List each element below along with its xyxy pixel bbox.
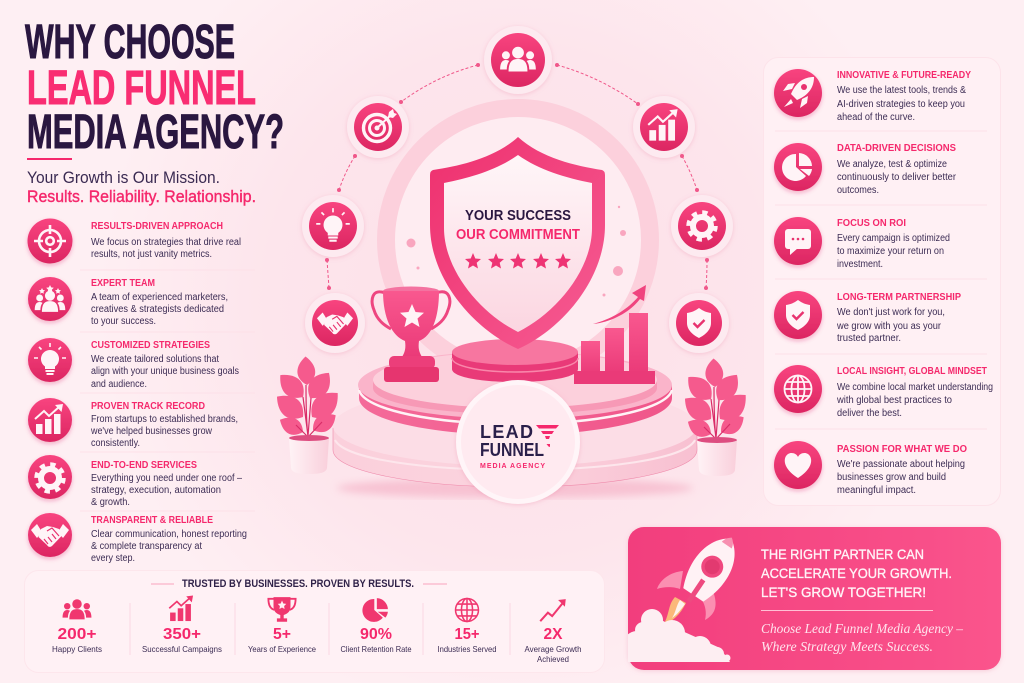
- item: proven track record: we've helped businesses grow: [90, 426, 213, 437]
- item: end-to-end services: & growth.: [91, 497, 130, 508]
- item: expert team: A team of experienced marketers,: [91, 292, 228, 303]
- cta headline: THE RIGHT PARTNER CAN: [761, 546, 924, 562]
- item: data-driven decisions: continuously to deliver better: [837, 172, 957, 183]
- orbit icon: light bulb: [302, 195, 364, 257]
- stat: successful campaigns: [142, 596, 222, 654]
- item: data-driven decisions: [774, 142, 957, 196]
- item: results-driven approach: results, not just vanity metrics.: [91, 249, 212, 260]
- stat: happy clients: [52, 599, 102, 654]
- dashed orbit connectors: [325, 63, 709, 290]
- item: innovative and future-ready: ahead of the curve.: [837, 112, 915, 123]
- item: end-to-end services: Everything you need under one roof –: [91, 473, 242, 484]
- orbit icon: target: [347, 96, 409, 158]
- trophy: [372, 286, 450, 382]
- item: local insight, global mindset: with global best practices to: [836, 395, 952, 406]
- cta tagline: Choose Lead Funnel Media Agency –: [761, 622, 964, 637]
- main title: LEAD FUNNEL: [27, 62, 256, 115]
- item: local insight, global mindset: We combine local market understanding: [837, 382, 993, 393]
- halo ring behind shield: [386, 108, 650, 372]
- item: results-driven approach: We focus on strategies that drive real: [91, 237, 241, 248]
- stat: average growth achieved: [524, 599, 582, 664]
- item: results-driven approach: RESULTS-DRIVEN APPROACH: [91, 220, 223, 232]
- stat: years of experience: [248, 597, 316, 654]
- main title: WHY CHOOSE: [25, 16, 235, 69]
- decorative spheres: [406, 206, 626, 296]
- item: expert team: [28, 277, 228, 327]
- stat: industries served: [438, 599, 497, 654]
- stat: client retention rate: [340, 598, 412, 654]
- item: long-term partnership: trusted partner.: [837, 333, 901, 344]
- item: local insight, global mindset: LOCAL INSIGHT, GLOBAL MINDSET: [837, 365, 987, 377]
- main title: [25, 16, 284, 159]
- logo funnel mark: [536, 425, 559, 447]
- item: proven track record: [28, 398, 238, 449]
- item: proven track record: From startups to established brands,: [91, 414, 238, 425]
- stat: years of experience: Years of Experience: [248, 644, 316, 654]
- item: passion for what we do: meaningful impact.: [837, 485, 916, 496]
- shield heading: [456, 208, 580, 243]
- item: passion for what we do: businesses grow and build: [837, 472, 946, 483]
- item: transparent and reliable: & complete transparency at: [91, 541, 202, 552]
- shield badge: [430, 137, 605, 349]
- shield heading: YOUR SUCCESS: [465, 208, 571, 224]
- item: data-driven decisions: We analyze, test & optimize: [837, 159, 947, 170]
- item: proven track record: consistently.: [91, 438, 140, 449]
- cta headline: LET'S GROW TOGETHER!: [761, 584, 926, 600]
- item: passion for what we do: PASSION FOR WHAT WE DO: [837, 443, 967, 455]
- cta headline: ACCELERATE YOUR GROWTH.: [761, 565, 952, 581]
- subtitle with accent rule: Your Growth is Our Mission.: [27, 168, 220, 187]
- item: innovative and future-ready: We use the latest tools, trends &: [837, 85, 966, 96]
- panel: trust stats: [24, 570, 604, 672]
- item: end-to-end services: END-TO-END SERVICES: [91, 459, 197, 471]
- central illustration: [271, 26, 753, 504]
- orbit icon: gear: [671, 195, 733, 257]
- cta tagline: Where Strategy Meets Success.: [761, 640, 933, 655]
- item: end-to-end services: strategy, execution, automation: [91, 485, 221, 496]
- five stars: [465, 253, 571, 268]
- stats heading: TRUSTED BY BUSINESSES. PROVEN BY RESULTS.: [182, 578, 414, 590]
- stat: average growth achieved: 2X: [544, 626, 563, 643]
- item: end-to-end services: [28, 455, 242, 508]
- stat: successful campaigns: 350+: [163, 626, 201, 643]
- item: transparent and reliable: [28, 513, 247, 564]
- item: transparent and reliable: every step.: [91, 553, 135, 564]
- item: long-term partnership: [774, 291, 961, 344]
- orbit icon: shield: [669, 293, 729, 353]
- item: focus on roi: [774, 217, 950, 270]
- stat: industries served: 15+: [454, 626, 480, 643]
- stat: happy clients: Happy Clients: [52, 644, 102, 654]
- item: expert team: to your success.: [91, 316, 156, 327]
- logo disc: MEDIA AGENCY: [480, 463, 545, 470]
- logo disc: FUNNEL: [480, 440, 544, 460]
- stat: industries served: Industries Served: [438, 644, 497, 654]
- orbit icon: team: [484, 26, 552, 94]
- logo disc: LEAD: [480, 422, 533, 442]
- item: passion for what we do: We're passionate about helping: [837, 459, 965, 470]
- stat: happy clients: 200+: [58, 626, 96, 643]
- item: customized strategies: [28, 338, 239, 390]
- subtitle with accent rule: [27, 158, 256, 206]
- item: expert team: creatives & strategists dedicated: [91, 304, 224, 315]
- stat: years of experience: 5+: [273, 626, 291, 643]
- item: innovative and future-ready: AI-driven strategies to keep you: [837, 99, 965, 110]
- plant left: [271, 356, 345, 474]
- stat: successful campaigns: Successful Campaigns: [142, 644, 222, 654]
- shield pedestal: [452, 339, 578, 382]
- cta headline: [761, 546, 952, 611]
- item: long-term partnership: LONG-TERM PARTNERSHIP: [837, 291, 961, 303]
- item: local insight, global mindset: deliver the best.: [837, 408, 902, 419]
- item: customized strategies: CUSTOMIZED STRATEGIES: [91, 339, 210, 351]
- panel: left benefits list: [28, 218, 255, 564]
- panel: right benefits: [764, 58, 1000, 506]
- subtitle with accent rule: Results. Reliability. Relationship.: [27, 187, 256, 206]
- item: local insight, global mindset: [774, 365, 993, 419]
- stat: client retention rate: Client Retention Rate: [340, 644, 412, 654]
- item: focus on roi: Every campaign is optimized: [837, 233, 950, 244]
- item: proven track record: PROVEN TRACK RECORD: [91, 400, 205, 412]
- logo disc: [456, 380, 580, 504]
- item: focus on roi: to maximize your return on: [837, 246, 944, 257]
- item: transparent and reliable: Clear communication, honest reporting: [91, 529, 247, 540]
- item: data-driven decisions: DATA-DRIVEN DECISIONS: [837, 142, 956, 154]
- item: innovative and future-ready: [774, 69, 971, 123]
- item: transparent and reliable: TRANSPARENT & RELIABLE: [91, 514, 213, 526]
- rocket illustration: [628, 538, 735, 662]
- plant right: [679, 358, 753, 476]
- item: data-driven decisions: outcomes.: [837, 185, 879, 196]
- item: customized strategies: align with your unique business goals: [91, 366, 239, 377]
- stat: average growth achieved: Achieved: [537, 654, 569, 664]
- orbit icon: growth chart: [633, 96, 695, 158]
- stat: average growth achieved: Average Growth: [524, 644, 582, 654]
- stat: client retention rate: 90%: [360, 626, 392, 643]
- item: focus on roi: investment.: [837, 259, 883, 270]
- item: passion for what we do: [774, 441, 967, 496]
- item: results-driven approach: [28, 218, 241, 264]
- item: customized strategies: We create tailored solutions that: [91, 354, 219, 365]
- item: focus on roi: FOCUS ON ROI: [837, 217, 906, 229]
- bar chart with arrow: [574, 285, 655, 384]
- item: expert team: EXPERT TEAM: [91, 277, 155, 289]
- podium: [333, 351, 697, 498]
- item: innovative and future-ready: INNOVATIVE & FUTURE-READY: [837, 69, 971, 81]
- item: long-term partnership: we grow with you as your: [836, 321, 942, 332]
- shield heading: OUR COMMITMENT: [456, 227, 580, 243]
- main title: MEDIA AGENCY?: [27, 106, 284, 159]
- cta tagline: [761, 622, 964, 655]
- item: long-term partnership: We don't just work for you,: [837, 307, 945, 318]
- item: customized strategies: and audience.: [91, 379, 147, 390]
- orbit icon: handshake: [305, 293, 365, 353]
- panel: call to action: [623, 527, 1001, 670]
